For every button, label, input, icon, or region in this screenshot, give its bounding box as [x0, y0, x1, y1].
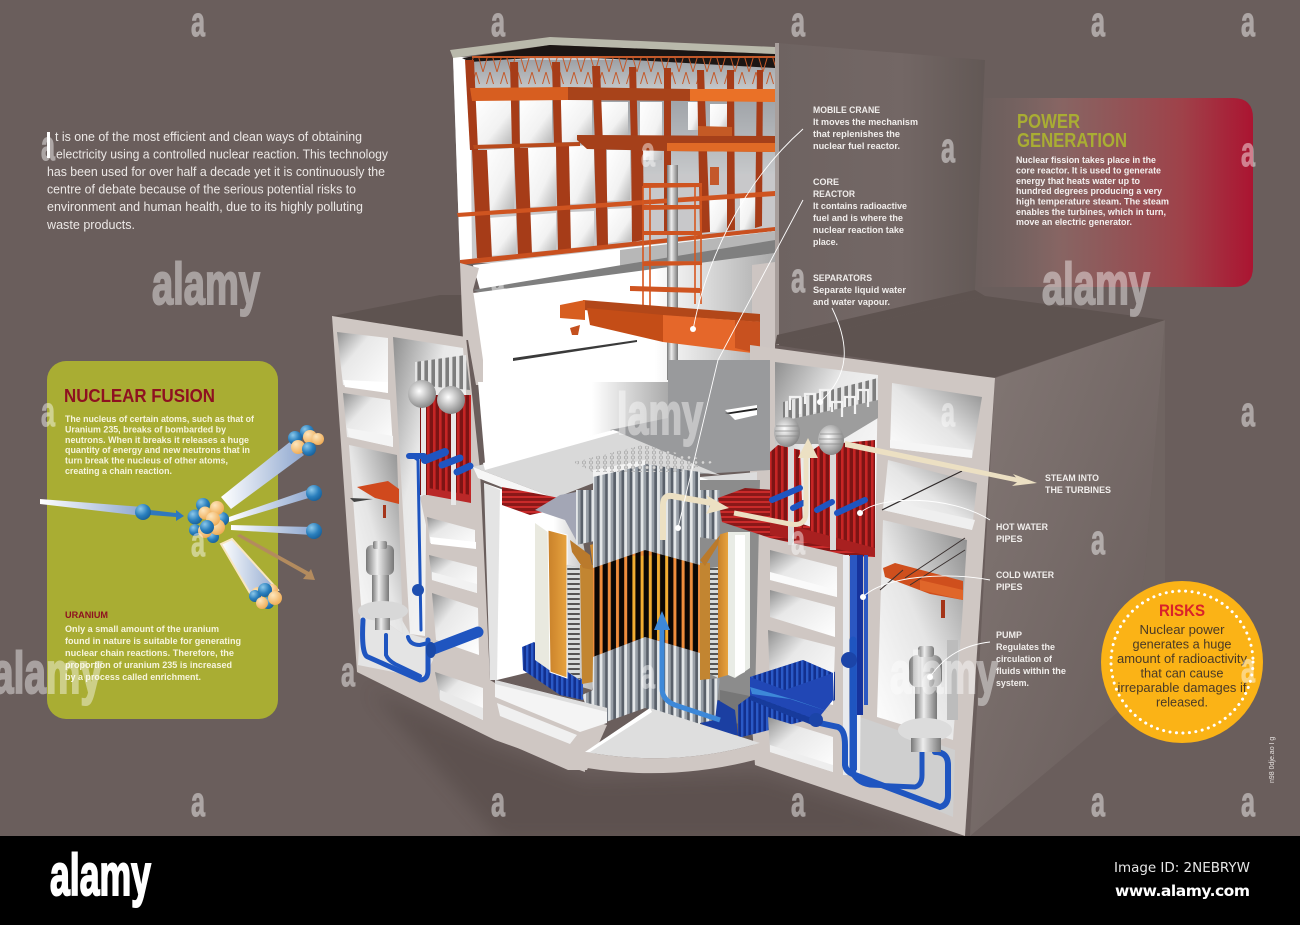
label: steam into the turbines: [1045, 473, 1111, 495]
upper tower side panel: [775, 43, 985, 345]
left wing rooms: [337, 332, 483, 720]
power description: core reactor. It is used to generate: [1016, 166, 1161, 176]
label: mobile crane: It moves the mechanism: [813, 117, 918, 127]
uranium description: by a process called enrichment.: [65, 672, 201, 682]
risks heading: RISKS: [1159, 601, 1205, 620]
incoming neutron: [40, 499, 143, 516]
heading: nuclear fusion: NUCLEAR FUSION: [64, 386, 215, 406]
shell layers right: [718, 532, 728, 678]
red pipes left of reactor: [502, 487, 575, 515]
label: separators: [813, 273, 907, 307]
travelling crane beam: [577, 135, 775, 152]
fusion description: neutrons. When it breaks it releases a huge: [65, 435, 249, 445]
label: cold water pipes: COLD WATER: [996, 570, 1054, 580]
label: mobile crane: nuclear fuel reactor.: [813, 141, 900, 151]
fusion description: quantity of energy and new neutrons that in: [65, 445, 250, 455]
leader lines: [678, 129, 990, 677]
top grid of discs: [573, 445, 715, 472]
power description: enables the turbines, which in turn,: [1016, 207, 1166, 217]
heading: power generation: GENERATION: [1017, 130, 1127, 152]
lower white bands: [473, 231, 775, 290]
label: pump: circulation of: [996, 654, 1053, 664]
power description: energy that heats water up to: [1016, 176, 1140, 186]
silver column: [667, 165, 678, 380]
concrete section cut: [332, 316, 995, 836]
orange columns: [465, 60, 763, 258]
left pump: [366, 545, 394, 575]
label: hot water pipes: PIPES: [996, 534, 1023, 544]
watermarks: a: [491, 778, 505, 825]
intro text: environment and human health, due to its highly polluting: [47, 200, 363, 214]
reactor hall floor slab: [473, 430, 720, 498]
label: cold water pipes: [996, 570, 1054, 592]
bridge crane: [583, 300, 760, 322]
fusion description: turn break the nucleus of other atoms,: [65, 456, 228, 466]
uranium heading: URANIUM: [65, 610, 108, 620]
label: cold water pipes: PIPES: [996, 582, 1023, 592]
intro text: [46, 130, 389, 232]
label: separators: and water vapour.: [813, 297, 890, 307]
atom upper right: [300, 425, 314, 439]
vertical credit: n98 0dje.ao I g: [1269, 737, 1276, 783]
label: mobile crane: MOBILE CRANE: [813, 105, 880, 115]
panel: power generation: [975, 98, 1253, 287]
panel: nuclear fusion: [47, 361, 278, 719]
atom lower right: [251, 587, 265, 601]
left small crane: [357, 481, 399, 504]
risks text: irreparable damages if: [1118, 681, 1247, 695]
energy arrow: [237, 534, 315, 580]
label: hot water pipes: HOT WATER: [996, 522, 1048, 532]
label: hot water pipes: [996, 522, 1048, 544]
label: steam into the turbines: STEAM INTO: [1045, 473, 1099, 483]
lower rods: [592, 637, 645, 727]
blue heat exchangers behind: [522, 642, 583, 700]
leader dots: [675, 326, 933, 680]
core fuel: [593, 550, 645, 657]
label: mobile crane: that replenishes the: [813, 129, 900, 139]
white room left of reactor: [484, 483, 600, 690]
label: core reactor: It contains radioactive: [813, 201, 907, 211]
concrete pier: [460, 263, 483, 385]
fusion description: [65, 414, 255, 476]
watermarks: a: [1241, 644, 1255, 691]
blue cross pipes: [772, 488, 865, 513]
roof: [450, 37, 775, 58]
watermarks: a: [791, 778, 805, 825]
cold water pipes: [850, 555, 857, 770]
footer logo: alamy: [50, 843, 151, 908]
watermarks: a: [1241, 128, 1255, 175]
separators: [783, 378, 878, 445]
large watermarks: alamy: [1042, 252, 1150, 317]
label: core reactor: nuclear reaction take: [813, 225, 904, 235]
watermarks: a: [191, 778, 205, 825]
watermarks: a: [941, 388, 955, 435]
uranium description: found in nature is suitable for generating: [65, 636, 241, 646]
label: pump: fluids within the: [996, 666, 1066, 676]
label: steam into the turbines: THE TURBINES: [1045, 485, 1111, 495]
coolant flow arrow: [654, 611, 830, 720]
watermarks: a: [941, 124, 955, 171]
red vertical tubes: [770, 445, 803, 528]
watermarks: a: [1091, 778, 1105, 825]
risks text: generates a huge: [1132, 638, 1232, 652]
watermarks: a: [791, 516, 805, 563]
label: core reactor: [813, 177, 907, 247]
label: mobile crane: [813, 105, 918, 151]
label: separators: Separate liquid water: [813, 285, 907, 295]
intro text: centre of debate because of the serious potential risks to: [47, 183, 356, 197]
watermarks: a: [791, 254, 805, 301]
red horizontal pipes: [718, 488, 875, 557]
neutrons: [306, 485, 322, 501]
label: core reactor: place.: [813, 237, 838, 247]
power description: hundred degrees producing a very: [1016, 186, 1162, 196]
footer bar: [0, 836, 1300, 925]
reactor vessel: [522, 445, 835, 738]
crane hook: [710, 167, 719, 185]
risks text: [1117, 623, 1248, 710]
uranium description: nuclear chain reactions. Therefore, the: [65, 648, 234, 658]
watermarks: a: [641, 128, 655, 175]
watermarks: a: [491, 254, 505, 301]
large watermarks: lamy: [617, 382, 703, 447]
fission diagram: [40, 425, 324, 609]
watermarks: a: [641, 650, 655, 697]
risks text: amount of radioactivity: [1117, 652, 1248, 666]
intro text: waste products.: [46, 218, 135, 232]
fusion description: creating a chain reaction.: [65, 466, 172, 476]
hall windows: [475, 100, 755, 256]
label: pump: [996, 630, 1066, 688]
heading: power generation: POWER: [1017, 111, 1080, 133]
watermarks: a: [1241, 388, 1255, 435]
watermarks: a: [41, 122, 55, 169]
roof truss: [472, 56, 775, 84]
walkways: [457, 191, 775, 217]
label: separators: SEPARATORS: [813, 273, 872, 283]
label: pump: Regulates the: [996, 642, 1055, 652]
rods behind collar: [576, 490, 720, 545]
heading: power generation: [1017, 111, 1127, 152]
building outer walls and roofs: [332, 295, 1165, 840]
beams: [221, 441, 304, 509]
label: pump: PUMP: [996, 630, 1022, 640]
power description: high temperature steam. The steam: [1016, 196, 1169, 206]
circular floor: [585, 708, 762, 773]
callout: risks: [1101, 581, 1263, 743]
power description: Nuclear fission takes place in the: [1016, 155, 1156, 165]
label: core reactor: fuel and is where the: [813, 213, 903, 223]
lower ledge beside reactor: [483, 680, 607, 770]
risks text: that can cause: [1140, 667, 1224, 681]
left wing blue pipes and pump: [350, 452, 478, 680]
intro text: has been used for over half a decade yet it is continuously the: [47, 165, 385, 179]
intro text: electricity using a controlled nuclear reaction. This technology: [56, 148, 389, 162]
large watermarks: alamy: [890, 641, 998, 706]
left wing steam generators: [408, 355, 471, 505]
uranium description: Only a small amount of the uranium: [65, 624, 219, 634]
right wing rooms: [768, 362, 982, 817]
right wing pump and blue pipes: [750, 640, 958, 807]
steam flow arrows: [663, 438, 1037, 540]
website: www.alamy.com: [1115, 882, 1250, 900]
fusion description: The nucleus of certain atoms, such as that of: [65, 414, 255, 424]
collars: [570, 540, 593, 570]
power description: move an electric generator.: [1016, 217, 1132, 227]
main beam: [470, 87, 568, 101]
right chamber backing: [700, 480, 760, 700]
risks text: Nuclear power: [1140, 623, 1224, 637]
intro text: t is one of the most efficient and clean ways of obtaining: [55, 130, 362, 144]
central chamber: [473, 360, 770, 730]
watermarks: a: [1091, 516, 1105, 563]
risks text: released.: [1156, 696, 1208, 710]
fusion description: Uranium 235, breaks of bombarded by: [65, 424, 226, 434]
right wing steam generators: [718, 378, 878, 775]
right wing crane: [880, 471, 965, 618]
reactor hall tower with crane structure: [450, 37, 775, 385]
label: core reactor: REACTOR: [813, 189, 855, 199]
upper rods: [593, 464, 645, 568]
large watermarks: alamy: [152, 252, 260, 317]
uranium description: proportion of uranium 235 is increased: [65, 660, 232, 670]
label: core reactor: CORE: [813, 177, 839, 187]
right pump: [909, 655, 942, 687]
watermarks: a: [41, 388, 55, 435]
shell layers left: [535, 523, 552, 672]
label: pump: system.: [996, 678, 1029, 688]
watermarks: a: [1241, 778, 1255, 825]
image id: Image ID: 2NEBRYW: [1114, 860, 1250, 876]
watermarks: a: [341, 648, 355, 695]
watermarks: a: [191, 518, 205, 565]
uranium description: [65, 624, 241, 682]
large watermarks: [0, 252, 1150, 706]
power description: [1016, 155, 1169, 227]
ladder tower: [630, 184, 702, 308]
hall back wall: [453, 53, 775, 265]
central nucleus: [196, 498, 210, 512]
